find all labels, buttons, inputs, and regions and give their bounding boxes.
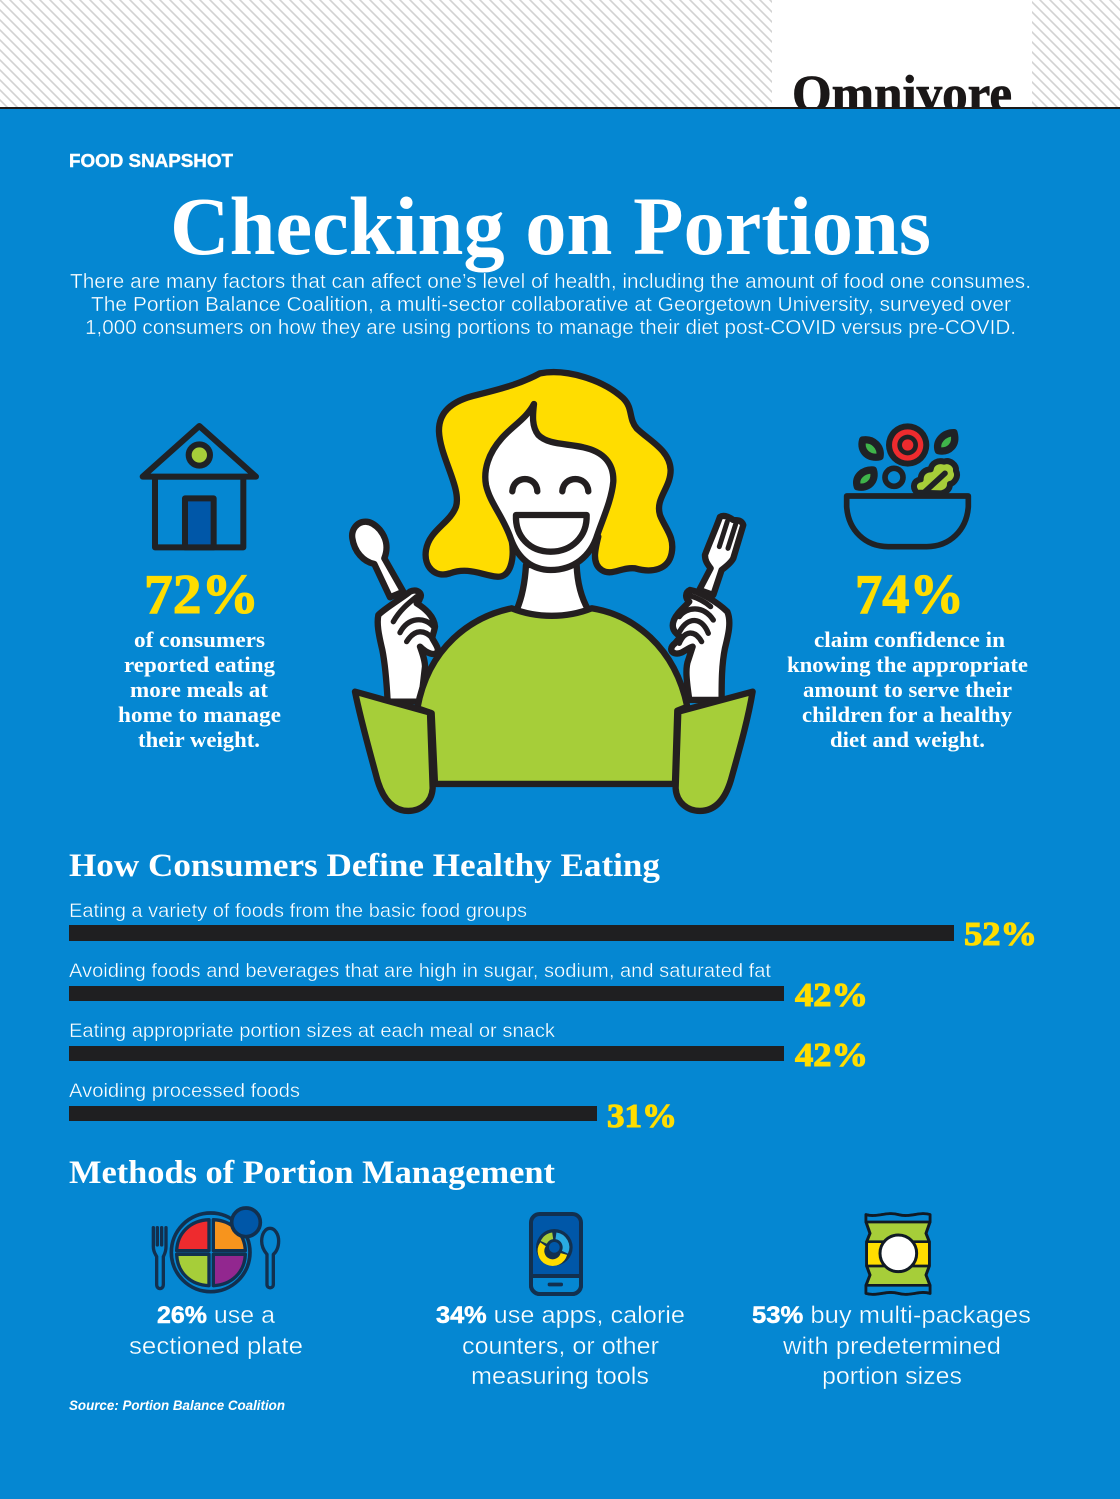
bar: variety of foods: Eating a variety of foods from the basic food groups [69, 901, 527, 922]
section label: FOOD SNAPSHOT [69, 151, 233, 171]
stat: 74 percent: amount to serve their [803, 677, 1012, 702]
stat: 74 percent: claim confidence in [814, 627, 1005, 652]
stat: 72 percent: of consumers [134, 627, 265, 652]
eyes [512, 479, 588, 491]
text: apps: counters, or other [462, 1333, 659, 1360]
sweater [417, 608, 687, 784]
icon: sectioned plate [153, 1208, 279, 1292]
stat: 72 percent: their weight. [138, 727, 260, 752]
stat: 72 percent: 72% [144, 564, 259, 626]
bar: variety of foods: 52% [964, 916, 1037, 953]
source note: Source: Portion Balance Coalition [69, 1397, 285, 1413]
intro text: 1,000 consumers on how they are using portions to manage their diet post-COVID versus pre-COVID. [85, 317, 1016, 339]
stat: 74 percent: diet and weight. [830, 727, 985, 752]
icon: salad bowl [847, 423, 968, 547]
stat: 72 percent [118, 564, 281, 752]
icon: phone app [531, 1214, 581, 1294]
stat: 72 percent: more meals at [130, 677, 269, 702]
bar: portion sizes: Eating appropriate portion sizes at each meal or snack [69, 1021, 556, 1042]
text: apps: measuring tools [471, 1363, 649, 1390]
bar: portion sizes [69, 1021, 868, 1074]
title: Checking on Portions [170, 180, 931, 272]
intro text [70, 271, 1031, 339]
header band [0, 0, 1120, 108]
text: sectioned plate: 26% use a [157, 1302, 276, 1329]
text: sectioned plate: sectioned plate [129, 1333, 303, 1360]
bar: avoiding sugar, sodium, fat [69, 961, 868, 1014]
bar: avoiding sugar, sodium, fat: 42% [795, 977, 868, 1014]
left hand and spoon [352, 522, 438, 702]
text: apps [436, 1302, 685, 1390]
illustration: smiling woman with spoon and fork [352, 372, 753, 811]
left sleeve [355, 692, 433, 811]
text: sectioned plate [129, 1302, 303, 1360]
stat: 72 percent: reported eating [124, 652, 275, 677]
text: apps: 34% use apps, calorie [436, 1302, 685, 1329]
stat: 74 percent: knowing the appropriate [787, 652, 1028, 677]
stat: 74 percent: 74% [855, 564, 964, 626]
bar: portion sizes: 42% [795, 1037, 868, 1074]
intro text: There are many factors that can affect one’s level of health, including the amount of food one consumes. [70, 271, 1031, 293]
mouth [516, 515, 587, 552]
bar: processed foods: 31% [607, 1098, 677, 1135]
text: multi-packages [752, 1302, 1031, 1390]
face [485, 404, 613, 570]
stat: 74 percent [787, 564, 1028, 752]
right sleeve [676, 692, 753, 811]
heading: healthy eating: How Consumers Define Healthy Eating [69, 848, 661, 884]
heading: portion management: Methods of Portion Management [69, 1155, 555, 1191]
bar: processed foods: Avoiding processed foods [69, 1081, 300, 1102]
masthead: Omnivore: Omnivore [792, 66, 1012, 123]
text: multi-packages: portion sizes [822, 1363, 962, 1390]
stat: 72 percent: home to manage [118, 702, 281, 727]
icon: snack package [866, 1214, 930, 1294]
hair [426, 372, 672, 577]
stat: 74 percent: children for a healthy [802, 702, 1012, 727]
bar: avoiding sugar, sodium, fat: Avoiding foods and beverages that are high in sugar, sodium, and saturated fat [69, 961, 772, 982]
intro text: The Portion Balance Coalition, a multi-sector collaborative at Georgetown University, surveyed over [91, 294, 1011, 316]
text: multi-packages: with predetermined [782, 1333, 1001, 1360]
text: multi-packages: 53% buy multi-packages [752, 1302, 1031, 1329]
icon: house [143, 426, 256, 547]
bar chart: healthy eating definitions [69, 901, 1037, 1135]
right hand and fork [671, 516, 743, 700]
bar: processed foods [69, 1081, 677, 1135]
bar: variety of foods [69, 901, 1037, 953]
neck [517, 565, 588, 617]
